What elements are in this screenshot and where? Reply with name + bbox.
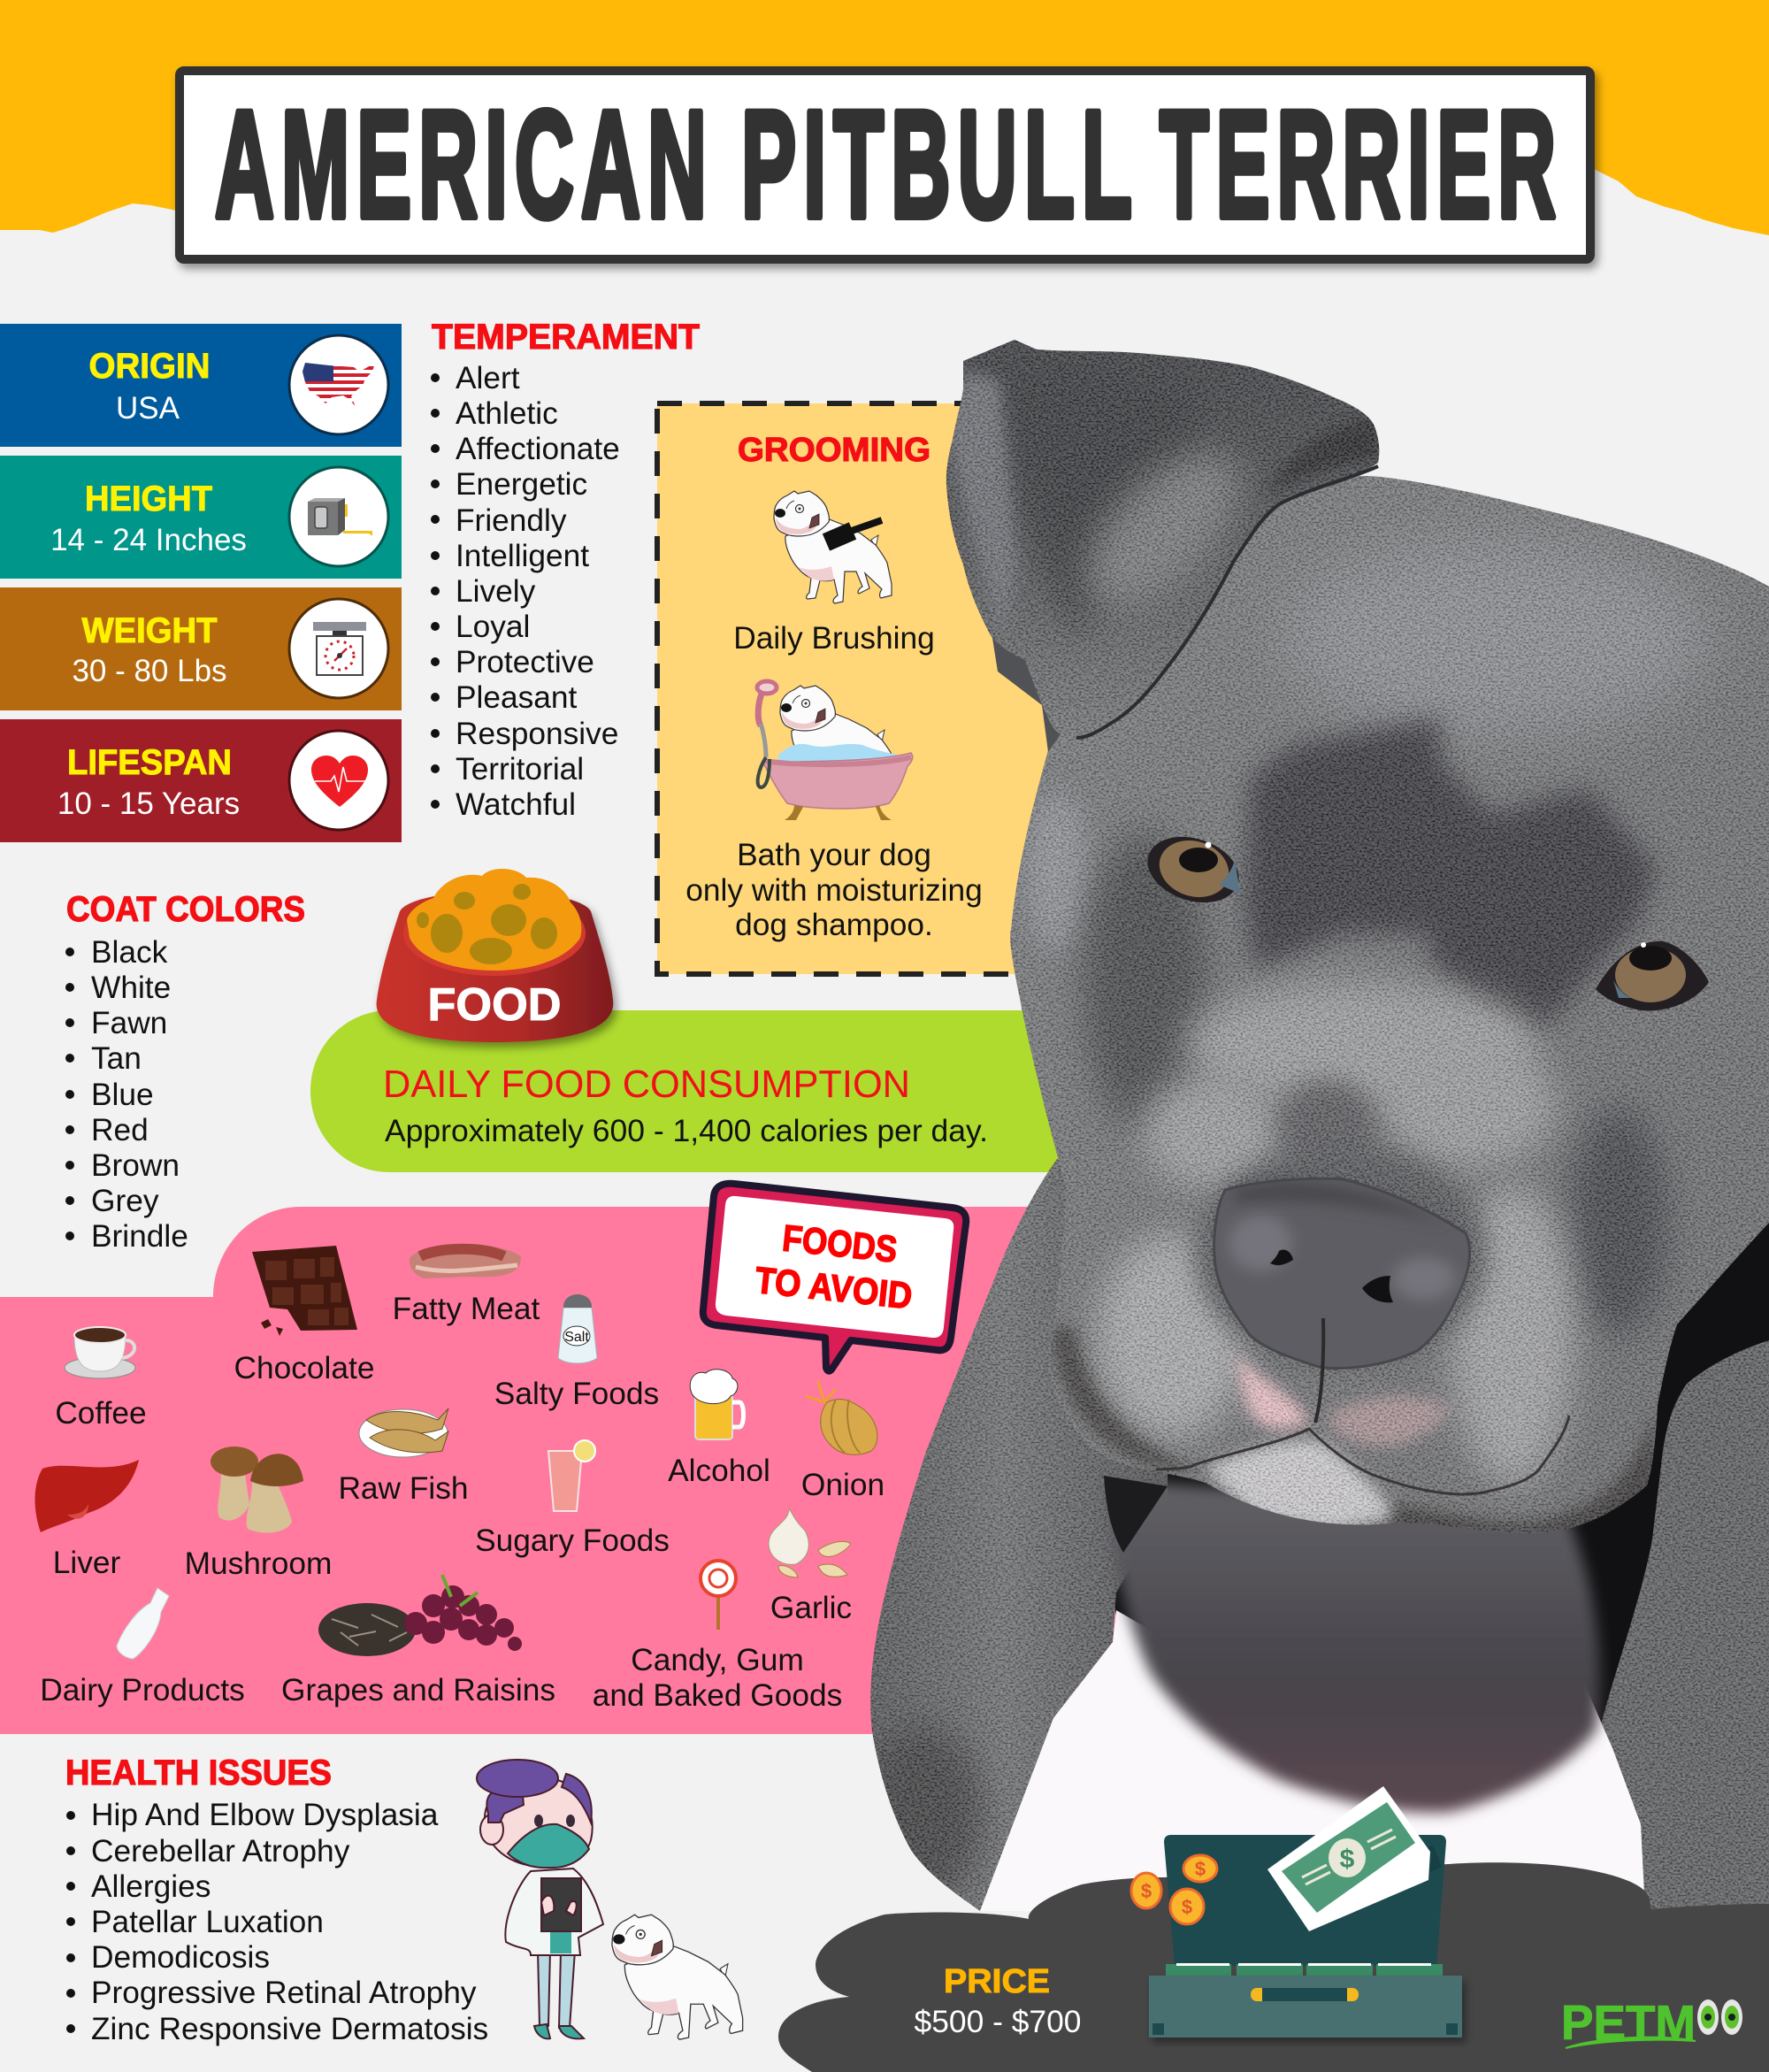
bills: $ (1340, 1845, 1355, 1874)
dog ear back flap (992, 610, 1079, 752)
dog ear (938, 336, 1389, 743)
health issues list: Zinc Responsive Dermatosis (91, 2012, 488, 2046)
stat: origin (0, 324, 402, 447)
panel: grooming (657, 403, 1099, 974)
stat: weight: WEIGHT (81, 611, 218, 650)
panel: grooming: Daily Brushing (733, 621, 935, 656)
icon: grapes and raisins (318, 1575, 522, 1656)
icon: tape measure (308, 498, 372, 536)
price text (915, 1963, 1081, 2039)
panel: foods to avoid (0, 1207, 1150, 1734)
health issues list: Cerebellar Atrophy (91, 1834, 350, 1869)
forehead light (1283, 540, 1707, 734)
panel: foods to avoid: Chocolate (234, 1351, 374, 1385)
bills (1267, 1786, 1442, 1931)
icon: salt shaker: Salt (564, 1330, 589, 1345)
icon: milk bottle (117, 1588, 169, 1659)
icon: lollipop (701, 1561, 736, 1630)
temperament list: Friendly (456, 503, 567, 538)
panel: foods to avoid: Garlic (770, 1591, 852, 1625)
icon: beer mug (690, 1370, 743, 1439)
dog right arm (1601, 1340, 1769, 1911)
panel: foods to avoid: Candy, Gum (631, 1643, 804, 1677)
temperament list: Territorial (456, 752, 584, 787)
panel: foods to avoid: Mushroom (185, 1546, 332, 1581)
icon: briefcase with money: $ (1195, 1858, 1206, 1880)
right muzzle pad (1451, 1186, 1574, 1486)
icon: briefcase with money (1131, 1786, 1462, 2037)
health issues list (65, 1754, 488, 2046)
panel: grooming: only with moisturizing (685, 873, 983, 908)
temperament list: Energetic (456, 467, 587, 502)
coat colors list (65, 890, 305, 1254)
icon: briefcase with money: $ (1182, 1896, 1192, 1918)
dog neck ruff (1106, 1479, 1600, 1813)
panel: grooming: GROOMING (738, 432, 930, 469)
panel: foods to avoid: Salty Foods (494, 1377, 659, 1411)
logo: petmoo: PETM (1561, 1995, 1696, 2050)
icon: liver (35, 1460, 139, 1532)
panel: price cloud (778, 1862, 1769, 2072)
title text: AMERICAN (215, 80, 714, 249)
panel: foods to avoid: Onion (801, 1468, 884, 1502)
panel: foods to avoid: Sugary Foods (475, 1523, 670, 1558)
left muzzle pad (1097, 1234, 1247, 1438)
bridge light (1185, 982, 1539, 1106)
coat colors list: COAT COLORS (66, 890, 305, 929)
dog right eye (1596, 941, 1709, 1011)
temperament list: Protective (456, 645, 594, 679)
icon: briefcase with money: $ (1141, 1880, 1152, 1902)
panel: foods to avoid: Grapes and Raisins (281, 1673, 555, 1707)
panel: foods to avoid: Dairy Products (40, 1673, 245, 1707)
illustration: pitbull dog photo (858, 336, 1769, 1920)
coat colors list: Brindle (91, 1219, 188, 1254)
panel: foods to avoid: Fatty Meat (393, 1292, 540, 1326)
dog mouth line (1156, 1416, 1569, 1494)
health issues list: Hip And Elbow Dysplasia (91, 1798, 439, 1832)
title box (180, 71, 1590, 259)
icon: usa flag map (302, 363, 374, 405)
panel: foods to avoid: and Baked Goods (593, 1678, 842, 1713)
title text: PITBULL (741, 80, 1139, 249)
stat: origin: USA (116, 391, 180, 426)
price text: $500 - $700 (915, 2005, 1081, 2039)
health issues list: Demodicosis (91, 1940, 270, 1975)
chin (1206, 1440, 1392, 1531)
stat: lifespan: LIFESPAN (67, 743, 232, 782)
coat colors list: White (91, 971, 171, 1005)
nose ring dark (1195, 1146, 1487, 1367)
icon: heart (311, 756, 368, 807)
temperament list: Affectionate (456, 432, 620, 466)
upper muzzle right (1380, 1044, 1557, 1168)
temperament list: Athletic (456, 396, 558, 431)
panel: foods to avoid: Coffee (55, 1396, 147, 1431)
panel: grooming: Bath your dog (737, 838, 931, 872)
coat colors list: Black (91, 935, 168, 970)
coat colors list: Blue (91, 1078, 154, 1112)
panel: foods to avoid: Liver (53, 1546, 120, 1580)
dog left arm lower shadow (858, 1725, 982, 1902)
stat: origin: ORIGIN (88, 347, 211, 386)
price text: PRICE (944, 1963, 1050, 2000)
dark brow band (1244, 718, 1658, 1035)
right cheek dark (1570, 1106, 1667, 1336)
stat: weight (0, 587, 402, 710)
panel: foods to avoid: Alcohol (668, 1454, 770, 1488)
dog arm fur texture (867, 1150, 1769, 1920)
temperament list: Responsive (456, 717, 618, 751)
coat colors list: Tan (91, 1041, 142, 1076)
icon: veterinarian (477, 1760, 603, 2038)
panel: foods to avoid: Raw Fish (338, 1471, 469, 1506)
callout: foods to avoid (703, 1184, 966, 1371)
torn yellow header band (0, 0, 1769, 235)
temperament list: Pleasant (456, 680, 578, 715)
dog black throat patch (1104, 1476, 1168, 1553)
callout: foods to avoid: TO AVOID (754, 1259, 914, 1316)
stat: height (0, 456, 402, 579)
icon: dog beside vet (612, 1915, 743, 2039)
health issues list: Progressive Retinal Atrophy (91, 1976, 477, 2010)
temperament list: Lively (456, 574, 536, 609)
callout: foods to avoid: FOODS (780, 1216, 900, 1270)
panel: daily food consumption (310, 1010, 1150, 1172)
coat colors list: Red (91, 1113, 149, 1147)
pink patch (1234, 1354, 1309, 1429)
title text (215, 80, 1563, 249)
dog neck shadow (1097, 1194, 1769, 1734)
temperament list: Loyal (456, 610, 530, 644)
stat: height: 14 - 24 Inches (50, 523, 247, 557)
panel: daily food consumption: Approximately 600 - 1,400 calories per day. (385, 1114, 988, 1148)
temperament list: Alert (456, 361, 520, 395)
icon: dog in bathtub (757, 681, 913, 820)
dog ear edge (1076, 466, 1378, 738)
stat: height: HEIGHT (85, 480, 212, 518)
dog left eye (1139, 825, 1247, 914)
dog nose (1214, 1178, 1470, 1423)
icon: kitchen scale (313, 622, 366, 675)
coat colors list: Grey (91, 1184, 159, 1218)
dog face fur texture (999, 460, 1769, 1548)
upper muzzle left (1141, 1075, 1283, 1190)
temperament list: Watchful (456, 787, 576, 822)
temperament list: TEMPERAMENT (432, 318, 700, 357)
health issues list: Patellar Luxation (91, 1905, 324, 1939)
jaw left edge (1051, 1327, 1203, 1473)
temperament list: Intelligent (456, 539, 589, 573)
panel: grooming: dog shampoo. (735, 908, 933, 942)
icon: onion (806, 1381, 877, 1454)
health issues list: HEALTH ISSUES (65, 1754, 332, 1792)
icon: fatty meat (410, 1244, 521, 1278)
stat: lifespan (0, 719, 402, 842)
stat: lifespan: 10 - 15 Years (57, 787, 240, 821)
icon: garlic (769, 1508, 851, 1577)
stop dark (1278, 1079, 1375, 1168)
icon: raw fish (359, 1408, 448, 1457)
icon: food bowl: FOOD (428, 979, 561, 1031)
icon: mushrooms (211, 1447, 303, 1533)
coat colors list: Brown (91, 1148, 180, 1183)
health issues list: Allergies (91, 1869, 211, 1904)
icon: food bowl (377, 869, 613, 1042)
left temple light (1026, 792, 1088, 951)
icon: dog being brushed (774, 491, 892, 603)
icon: chocolate (252, 1246, 357, 1336)
panel: daily food consumption: DAILY FOOD CONSUMPTION (383, 1063, 910, 1106)
icon: coffee cup (65, 1327, 135, 1378)
dog left arm (870, 1159, 1168, 1911)
lower jaw right edge (1380, 1407, 1663, 1539)
coat colors list: Fawn (91, 1006, 167, 1040)
coins (1131, 1855, 1217, 1924)
icon: salt shaker (558, 1294, 597, 1363)
stat: weight: 30 - 80 Lbs (72, 654, 227, 688)
dog head (999, 460, 1769, 1548)
dog white chest (980, 1610, 1645, 1911)
temperament list (431, 318, 700, 822)
left eye shadow (1084, 832, 1207, 1132)
icon: juice glass (548, 1440, 595, 1511)
